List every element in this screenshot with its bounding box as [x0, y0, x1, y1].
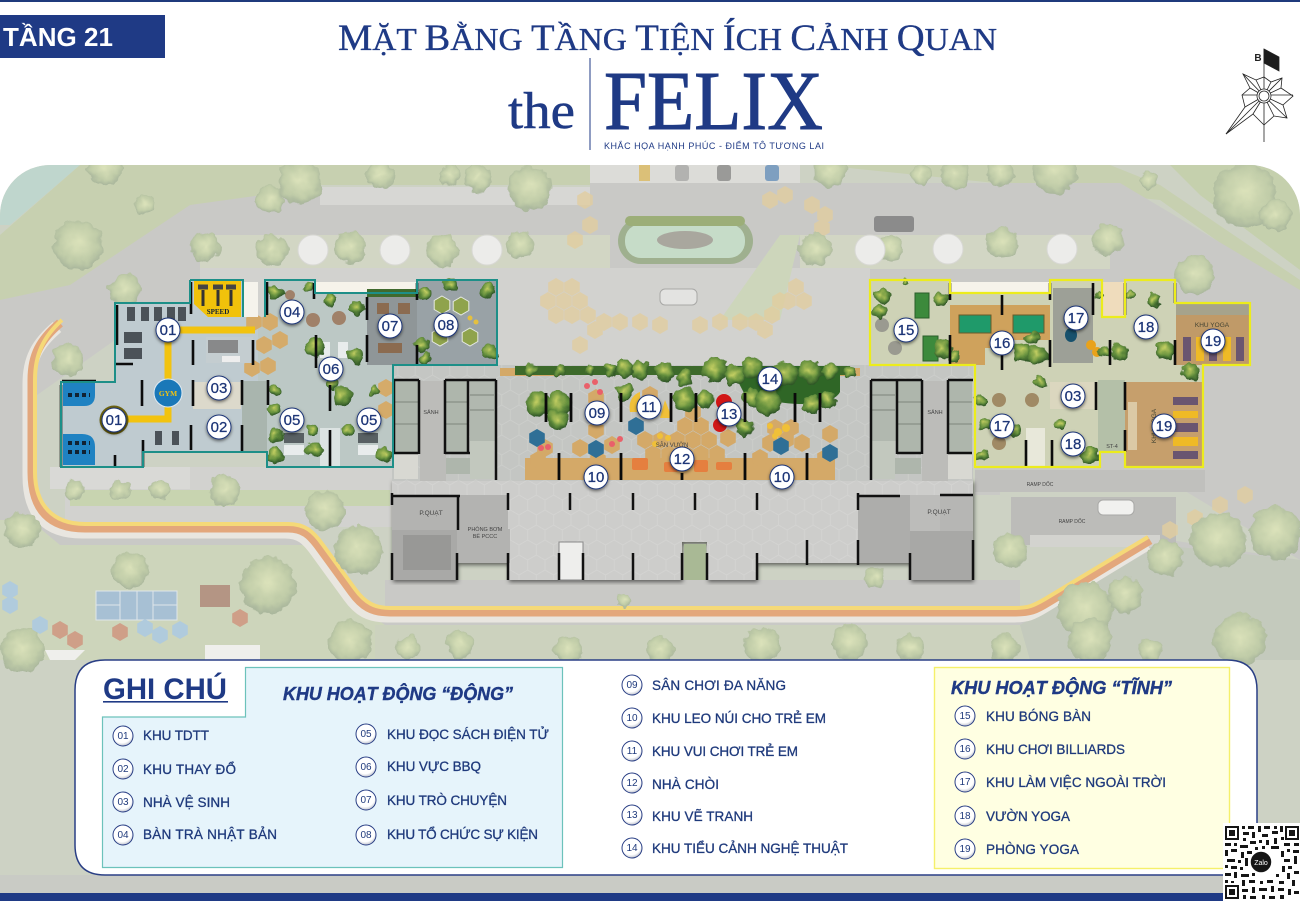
- panel: centre building lower block: BỂ PCCC: [473, 533, 497, 540]
- outdoor work area: [1053, 288, 1093, 363]
- active zone box: BÀN TRÀ NHẬT BẢN: [143, 827, 277, 842]
- main road: [0, 183, 1300, 660]
- panel: centre building lower block: [392, 480, 973, 580]
- walls: [950, 283, 1175, 466]
- playground with court: [2, 581, 260, 660]
- blue hexagons: [529, 417, 838, 462]
- GYM marker: [154, 379, 182, 407]
- numbered plan markers: 05: [284, 412, 300, 429]
- hex pods: [432, 296, 478, 346]
- quiet zone box: 17: [959, 777, 971, 788]
- active zone box: KHU HOẠT ĐỘNG “ĐỘNG”: [283, 683, 513, 704]
- active zone box: 06: [360, 762, 372, 773]
- numbered plan markers: 16: [994, 335, 1010, 352]
- room: P.QUẠT west: [392, 496, 464, 529]
- yoga room upper: KHU YOGA: [1195, 322, 1230, 329]
- quiet zone box: KHU HOẠT ĐỘNG “TĨNH”: [951, 677, 1172, 698]
- active zone box: KHU VỰC BBQ: [387, 759, 481, 774]
- parked cars: [639, 165, 1134, 515]
- quiet zone box: KHU CHƠI BILLIARDS: [986, 742, 1125, 757]
- numbered plan markers: 01: [106, 412, 122, 429]
- table tennis: [915, 293, 938, 361]
- quiet zone box: 18: [959, 811, 971, 822]
- SPEED room: [194, 281, 241, 317]
- numbered plan markers: 19: [1205, 333, 1221, 350]
- east tower core: [871, 380, 973, 481]
- bottom navy bar: [0, 893, 1300, 901]
- quiet zone box: KHU BÓNG BÀN: [986, 709, 1091, 724]
- numbered plan markers: 17: [994, 418, 1010, 435]
- numbered plan markers: 18: [1138, 319, 1154, 336]
- numbered plan markers: 12: [674, 451, 690, 468]
- lower terrace features: [992, 393, 1039, 450]
- umbrellas: [298, 234, 1077, 265]
- active zone box: 03: [117, 797, 129, 808]
- numbered plan markers: 10: [774, 469, 790, 486]
- icon: compass: B: [1254, 53, 1262, 64]
- yellow sculpture: [1086, 340, 1102, 357]
- garden floor: [258, 280, 497, 467]
- panel: quiet zone plan (right): ST-4: [1106, 444, 1118, 450]
- shared activities list: 12: [626, 778, 638, 789]
- active zone box: 05: [360, 729, 372, 740]
- gym floor: [61, 280, 258, 467]
- active zone box: 08: [360, 830, 372, 841]
- shared activities list: 09: [626, 680, 638, 691]
- quiet zone box: 16: [959, 744, 971, 755]
- drop-off ramp: RAMP DỐC: [1059, 518, 1086, 525]
- quiet zone box: 15: [959, 711, 971, 722]
- numbered plan markers: 14: [762, 371, 778, 388]
- floor badge: TẦNG 21: [0, 15, 165, 58]
- quiet zone box: 19: [959, 844, 971, 855]
- quiet zone box: VƯỜN YOGA: [986, 809, 1070, 824]
- west road detail: jogging track: [29, 320, 1150, 616]
- numbered plan markers: 07: [382, 318, 398, 335]
- panel: central garden: [392, 357, 973, 481]
- QR code: [1223, 823, 1300, 901]
- east tower core: SẢNH: [927, 409, 943, 416]
- garden trees: [267, 278, 498, 463]
- numbered plan markers: 17: [1068, 310, 1084, 327]
- pale landscape trees: [0, 150, 1300, 672]
- yellow outline: [870, 280, 1250, 467]
- floor badge: TẦNG 21: TẦNG 21: [3, 22, 113, 52]
- active zone box: NHÀ VỆ SINH: [143, 795, 230, 810]
- loungers: [632, 458, 732, 472]
- SPEED room: SPEED: [207, 308, 229, 316]
- legend panel: [75, 660, 1257, 875]
- shared activities list: [622, 675, 848, 858]
- southwest lawn with playground: [0, 520, 385, 660]
- active zone box: KHU TDTT: [143, 728, 209, 743]
- stair: [242, 381, 267, 452]
- trees: [523, 357, 856, 437]
- blue stretching rooms: [63, 382, 95, 465]
- top navy rule: [0, 0, 1300, 2]
- drop-off ramp: RAMP DỐC: [1027, 481, 1054, 488]
- numbered plan markers: 08: [438, 317, 454, 334]
- road under plan: [385, 580, 1020, 606]
- logo: the FELIX: the: [508, 83, 575, 140]
- shared activities list: KHU VẼ TRANH: [652, 809, 753, 824]
- legend heading: GHI CHÚ: [103, 672, 227, 706]
- shared activities list: 10: [626, 713, 638, 724]
- planter strips: [200, 235, 610, 269]
- west tower core: [393, 380, 496, 481]
- parking strip: [590, 165, 800, 183]
- quiet zone box: [934, 668, 1230, 868]
- water edge top left: [0, 165, 80, 225]
- billiards floor: [950, 305, 1050, 365]
- drop-off ramp: [975, 470, 1205, 547]
- yoga room upper: [1176, 303, 1250, 365]
- active zone box: [102, 668, 562, 868]
- numbered plan markers: 18: [1065, 436, 1081, 453]
- active zone box: KHU TỔ CHỨC SỰ KIỆN: [387, 827, 538, 842]
- numbered plan markers: 11: [641, 399, 657, 416]
- panel: centre building lower block: P.QUẠT: [927, 509, 951, 516]
- panel: central garden: SÂN VƯỜN: [656, 442, 688, 449]
- logo: the FELIX: FELIX: [604, 55, 823, 148]
- quiet zone box: KHU LÀM VIỆC NGOÀI TRỜI: [986, 775, 1166, 790]
- numbered plan markers: 04: [284, 304, 300, 321]
- garden planting: [873, 279, 1199, 464]
- numbered plan markers: 02: [211, 419, 227, 436]
- numbered plan markers: 13: [721, 406, 737, 423]
- shared activities list: SÂN CHƠI ĐA NĂNG: [652, 678, 786, 693]
- terrace pillars: [546, 393, 820, 480]
- Zalo badge: Zalo: [1254, 860, 1268, 867]
- numbered plan markers: [102, 300, 1225, 489]
- panel: centre building lower block: P.QUẠT: [419, 510, 443, 517]
- numbered plan markers: 05: [361, 412, 377, 429]
- numbered plan markers: 10: [588, 469, 604, 486]
- red play pieces: [538, 379, 623, 451]
- active zone box: 04: [117, 830, 129, 841]
- panel: quiet zone plan (right): [870, 279, 1250, 467]
- active zone box: 01: [117, 731, 129, 742]
- walls: [61, 282, 417, 467]
- tan hexagon paving: [540, 186, 1253, 539]
- shared activities list: KHU LEO NÚI CHO TRẺ EM: [652, 711, 826, 726]
- teal outline: [61, 280, 497, 467]
- title: MẶT BẰNG TẦNG TIỆN ÍCH CẢNH QUAN: [338, 17, 997, 59]
- numbered plan markers: 09: [589, 405, 605, 422]
- active zone box: KHU ĐỌC SÁCH ĐIỆN TỬ: [387, 727, 549, 742]
- fountain plaza: [618, 216, 753, 264]
- panel: active zone plan (left): [61, 278, 498, 467]
- lawn: [0, 165, 590, 300]
- hexagon sand patches: [500, 368, 860, 480]
- GYM marker: GYM: [159, 389, 177, 398]
- numbered plan markers: 15: [898, 322, 914, 339]
- yellow route: [115, 330, 255, 419]
- shared activities list: KHU VUI CHƠI TRẺ EM: [652, 744, 798, 759]
- active zone box: 02: [117, 764, 129, 775]
- active zone box: KHU TRÒ CHUYỆN: [387, 793, 507, 808]
- changing room: [206, 337, 253, 363]
- icon: compass: [1226, 49, 1293, 142]
- numbered plan markers: 03: [211, 380, 227, 397]
- panel: centre building lower block: PHÒNG BƠM: [468, 526, 503, 533]
- active zone box: KHU THAY ĐỔ: [143, 762, 236, 777]
- logo: the FELIX: [508, 55, 824, 151]
- shared activities list: 11: [627, 746, 638, 757]
- shared activities list: 14: [626, 843, 638, 854]
- numbered plan markers: 19: [1156, 418, 1172, 435]
- numbered plan markers: 03: [1065, 388, 1081, 405]
- numbered plan markers: 06: [323, 361, 339, 378]
- west tower core: SẢNH: [423, 409, 439, 416]
- yoga room lower: KHU YOGA: [1151, 408, 1158, 443]
- logo: the FELIX: KHẮC HỌA HẠNH PHÚC - ĐIỂM TÔ TƯƠNG LAI: [604, 140, 824, 151]
- sand hexes: [244, 313, 394, 419]
- quiet zone box: PHÒNG YOGA: [986, 842, 1079, 857]
- numbered plan markers: 01: [160, 322, 176, 339]
- green terrace: [515, 366, 850, 375]
- yoga room lower: [1125, 382, 1203, 467]
- active zone box: 07: [360, 795, 372, 806]
- shared activities list: NHÀ CHÒI: [652, 777, 719, 792]
- lower left planting: [65, 467, 395, 527]
- shared activities list: KHU TIỂU CẢNH NGHỆ THUẬT: [652, 841, 848, 856]
- terrace furniture: [285, 290, 346, 327]
- gym machines: [124, 307, 186, 445]
- shared activities list: 13: [626, 810, 638, 821]
